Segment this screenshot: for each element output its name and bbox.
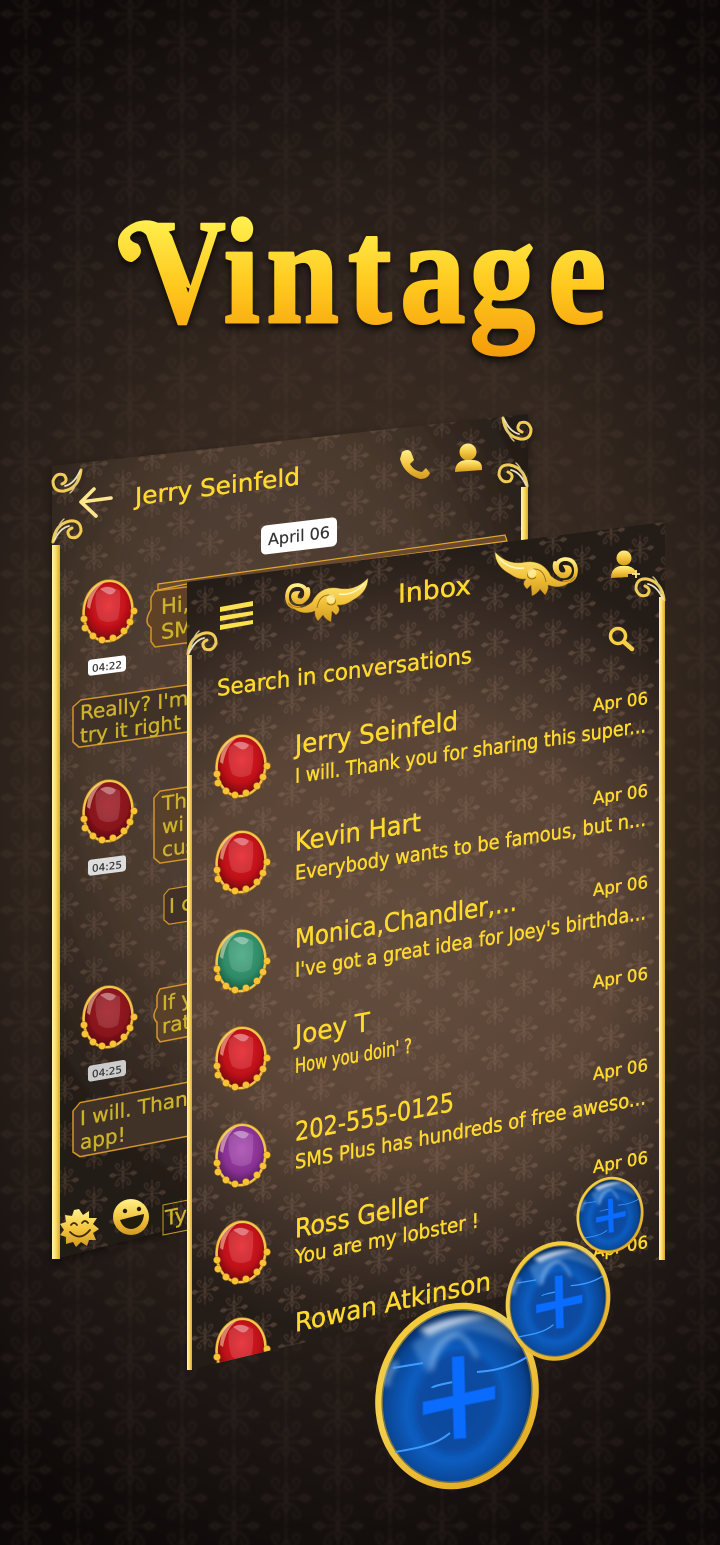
row: Rowan Atkinson: Apr 06 bbox=[593, 1233, 648, 1263]
time 04:22: 04:22 bbox=[92, 660, 122, 675]
row: Joey T: Apr 06 bbox=[593, 964, 648, 993]
text input bbox=[163, 1199, 193, 1235]
title: Vintage: intage bbox=[224, 190, 606, 355]
bubble: outgoing 2 bbox=[164, 885, 194, 925]
bubble: outgoing 3: app! bbox=[80, 1122, 126, 1155]
row: Joey T bbox=[211, 964, 648, 1093]
bubble: outgoing 3: I will. Thank bbox=[80, 1084, 200, 1131]
icon: emoji bbox=[113, 1199, 149, 1235]
icon: back arrow bbox=[81, 489, 111, 516]
row: Monica,Chandler: Apr 06 bbox=[593, 873, 648, 901]
row: Joey T: Joey T bbox=[293, 1008, 371, 1051]
date pill: April 06 bbox=[268, 523, 330, 549]
icon: phone bbox=[400, 450, 430, 479]
row: Monica,Chandler: Monica,Chandler,... bbox=[295, 887, 517, 955]
row: Jerry Seinfeld: I will. Thank you for sharing this super... bbox=[295, 713, 646, 788]
row: Kevin Hart: Apr 06 bbox=[593, 781, 648, 809]
icon: contact bbox=[455, 444, 482, 472]
bubble: outgoing 1: try it right n bbox=[80, 707, 200, 748]
avatar: red gem 1 bbox=[78, 576, 138, 646]
row: Ross Geller: Ross Geller bbox=[295, 1189, 428, 1245]
title: Vintage: V bbox=[138, 189, 226, 355]
bubble: outgoing 1: Really? I'm bbox=[80, 686, 188, 725]
icon: add contact bbox=[611, 550, 640, 578]
ornament left bbox=[287, 578, 368, 622]
bubble: incoming 2: wi bbox=[162, 812, 184, 839]
bubble: outgoing 1 bbox=[73, 683, 203, 749]
bubble: incoming 1 bbox=[147, 584, 207, 648]
search field label: Search in conversations bbox=[217, 643, 472, 702]
bubble: incoming 3: If y bbox=[162, 986, 193, 1015]
date pill bbox=[261, 517, 337, 555]
bubble: outgoing 2: I c bbox=[169, 891, 192, 918]
contact name: Jerry Seinfeld bbox=[133, 462, 300, 511]
corner ornaments bbox=[188, 577, 664, 654]
text input: Ty bbox=[164, 1201, 187, 1231]
bubble: incoming 2: The bbox=[161, 786, 199, 816]
row: Monica,Chandler: I've got a great idea for Joey's birthda... bbox=[295, 900, 646, 982]
bubble: outgoing 3 bbox=[73, 1080, 200, 1158]
time 04:25: 04:25 bbox=[92, 860, 122, 875]
row: 202-555-0125: 202-555-0125 bbox=[295, 1088, 454, 1148]
row: Jerry Seinfeld bbox=[211, 689, 648, 801]
icon: sticker sun bbox=[60, 1209, 99, 1247]
row: Kevin Hart: Everybody wants to be famous, but n... bbox=[295, 807, 646, 885]
row: Rowan Atkinson bbox=[213, 1235, 648, 1364]
heading: Inbox: Inbox bbox=[398, 571, 471, 610]
avatar: red gem 2 bbox=[78, 776, 138, 846]
bubble: incoming 1: SM bbox=[161, 615, 192, 644]
time 04:25 bbox=[88, 855, 126, 876]
row: 202-555-0125 bbox=[211, 1056, 648, 1190]
row: Jerry Seinfeld: Jerry Seinfeld bbox=[293, 707, 458, 761]
bubble: incoming 3: rat bbox=[162, 1009, 190, 1038]
corner ornaments bbox=[53, 418, 531, 542]
panel: inbox screen (front) bbox=[187, 522, 665, 1384]
row: Ross Geller: You are my lobster ! bbox=[294, 1208, 479, 1269]
row: Ross Geller: Apr 06 bbox=[593, 1148, 648, 1178]
rail above inbox bbox=[158, 535, 507, 590]
icon: menu bbox=[220, 601, 253, 630]
avatar: red gem 3 bbox=[78, 982, 138, 1052]
back panel side bars bbox=[52, 487, 528, 1259]
row: Joey T: How you doin' ? bbox=[295, 1034, 412, 1078]
floating action button: medium bbox=[493, 1230, 623, 1372]
row: Kevin Hart: Kevin Hart bbox=[295, 808, 421, 858]
row: 202-555-0125: Apr 06 bbox=[593, 1056, 648, 1085]
time 04:22 bbox=[88, 655, 126, 676]
time 04:25 bbox=[88, 1060, 126, 1082]
time 04:25: 04:25 bbox=[92, 1065, 122, 1081]
row: Jerry Seinfeld: Apr 06 bbox=[593, 689, 648, 716]
floating action button: large bbox=[356, 1285, 558, 1507]
front panel side bars bbox=[187, 597, 665, 1370]
bubble: incoming 2: cus bbox=[162, 833, 196, 862]
icon: search bbox=[610, 628, 632, 649]
row: 202-555-0125: SMS Plus has hundreds of free aweso... bbox=[295, 1085, 646, 1174]
row: Rowan Atkinson: Rowan Atkinson bbox=[295, 1267, 491, 1339]
bubble: incoming 3 bbox=[154, 982, 194, 1043]
bubble: incoming 2 bbox=[154, 785, 199, 864]
row: Ross Geller bbox=[211, 1148, 648, 1287]
row: Kevin Hart bbox=[211, 781, 648, 897]
ornament right bbox=[495, 552, 576, 596]
row: Monica,Chandler bbox=[211, 873, 648, 996]
panel: conversation screen (back) bbox=[52, 414, 531, 1260]
bubble: incoming 1: Hi, bbox=[161, 591, 189, 619]
floating action button: small bbox=[568, 1170, 652, 1260]
